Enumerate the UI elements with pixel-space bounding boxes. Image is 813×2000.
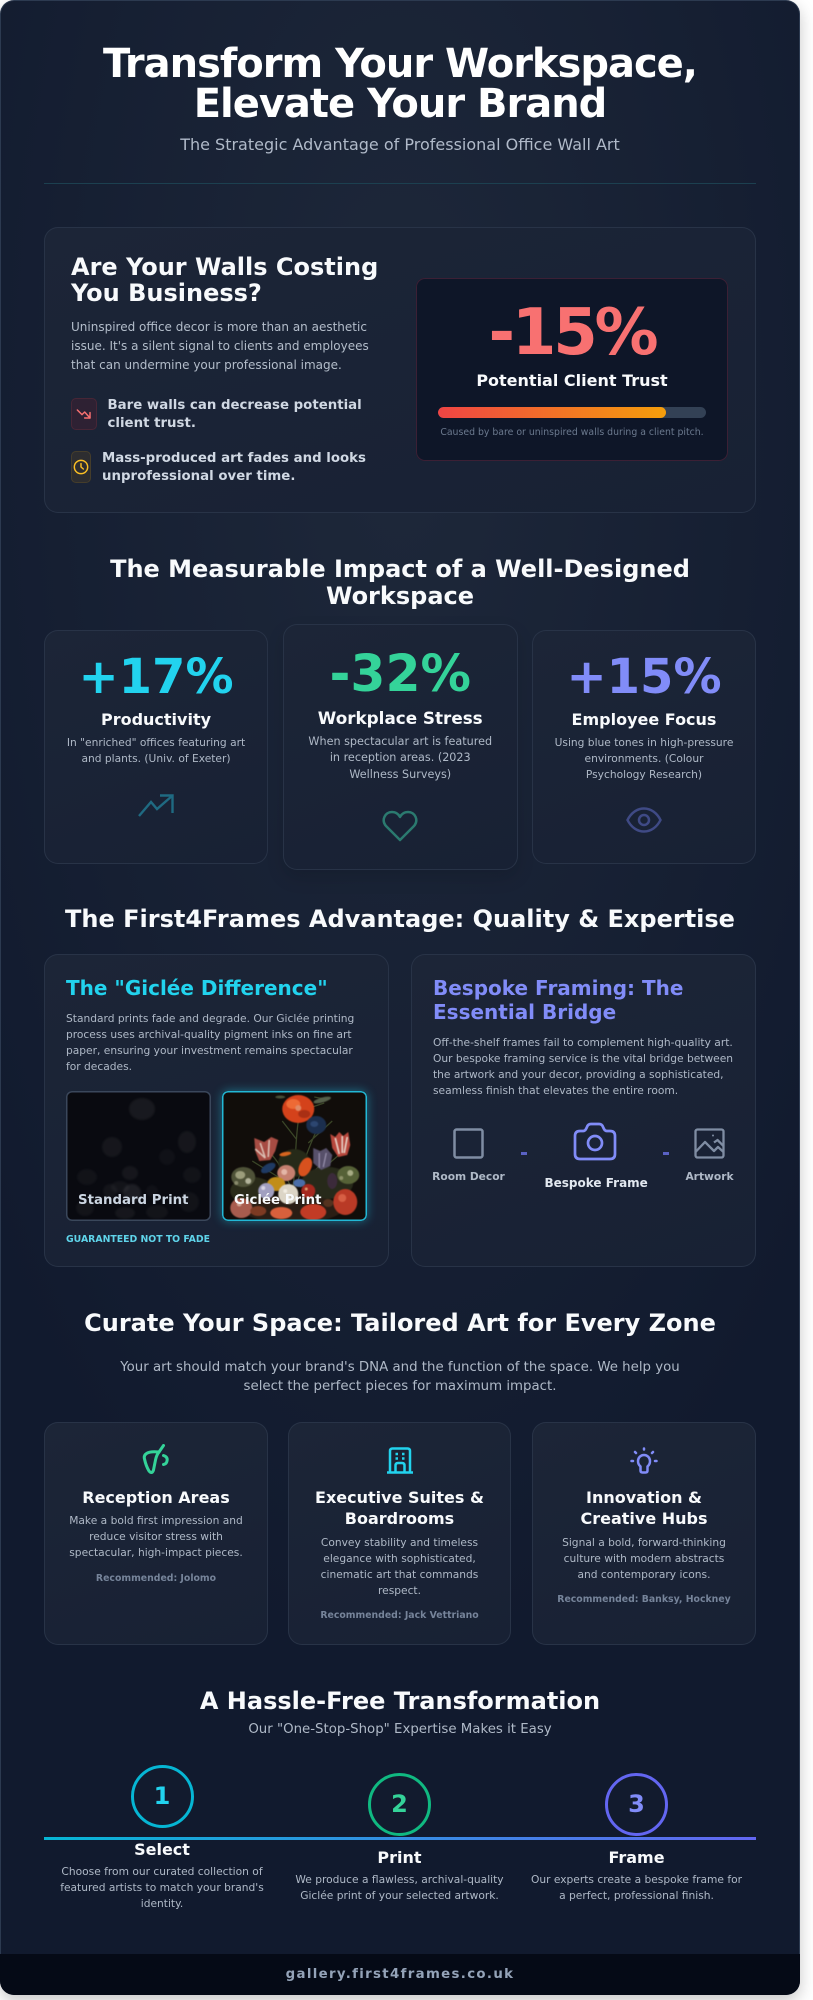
description: Wellness Surveys) [349,768,451,781]
description [321,1536,478,1597]
connector [662,1152,668,1154]
description: spectacular, high-impact pieces. [69,1546,243,1559]
zone title [580,1488,708,1528]
icon: heart [382,810,418,842]
description: elegance with sophisticated, [323,1552,476,1565]
step description: a perfect, professional finish. [559,1889,714,1902]
description [555,736,733,781]
step description [60,1865,264,1910]
description: Using blue tones in high-pressure [555,736,733,749]
icon: megaphone [142,1444,169,1474]
bullet: mass-produced art: unprofessional over time. [102,469,295,484]
badge: guaranteed: GUARANTEED NOT TO FADE [66,1234,210,1245]
heading: walls costing: You Business? [71,279,262,307]
recommendation: Recommended: Banksy, Hockney [557,1594,731,1605]
description: culture with modern abstracts [564,1552,724,1565]
step description [531,1873,742,1902]
title [103,41,697,127]
panel: innovation hubs [532,1422,756,1645]
step label: Frame [608,1848,665,1867]
big number: -15% [489,296,655,370]
text block: curate intro: Your art should match your brand's DNA and the function of the space. We help you [120,1360,680,1375]
icon: trending down [71,398,97,430]
step description: Our experts create a bespoke frame for [531,1873,742,1886]
label: room decor: Room Decor [432,1170,505,1183]
step 1: select [60,1765,264,1910]
panel: executive suites [288,1422,511,1645]
icon: clock [71,451,91,483]
icon: eye [626,807,662,833]
title: Elevate Your Brand [194,81,606,127]
step 3: frame [531,1773,742,1902]
step number circle [605,1773,668,1836]
number: +17% [78,649,234,705]
description: In "enriched" offices featuring art [67,736,245,749]
bullet: bare walls: client trust. [108,416,196,431]
bullet: bare walls [108,398,362,431]
bullet: mass-produced art: Mass-produced art fades and looks [102,450,366,466]
description: and plants. (Univ. of Exeter) [81,752,231,765]
text block: bespoke: Our bespoke framing service is the vital bridge between [433,1052,733,1065]
label: artwork: Artwork [685,1170,734,1183]
description [67,736,245,765]
step description: featured artists to match your brand's [60,1881,264,1894]
description: and contemporary icons. [578,1568,710,1581]
text block: uninspired decor [71,320,369,372]
description: respect. [378,1584,421,1597]
subheading: one-stop-shop: Our "One-Stop-Shop" Expertise Makes it Easy [248,1722,552,1737]
zone title [315,1488,484,1528]
text block: giclee: Standard prints fade and degrade. Our Giclée printing [66,1012,354,1025]
text block: bespoke: the artwork and your decor, providing a sophisticated, [433,1068,724,1081]
caption: Caused by bare or uninspired walls during a client pitch. [440,426,704,438]
heading: hassle-free transformation: A Hassle-Free Transformation [200,1687,600,1715]
step number circle [368,1773,431,1836]
number: -32% [329,644,471,703]
step description: Choose from our curated collection of [61,1865,263,1878]
text block: uninspired decor: that can undermine your professional image. [71,358,342,372]
step label: Select [134,1840,190,1859]
heading: measurable impact: The Measurable Impact of a Well-Designed [110,555,690,583]
step number circle: 3 [628,1790,645,1818]
heading: bespoke: Essential Bridge [433,1000,616,1024]
step 2: print [295,1773,504,1902]
panel: giclee difference [44,954,389,1267]
description: environments. (Colour [585,752,703,765]
text block: uninspired decor: Uninspired office decor is more than an aesthetic [71,320,367,334]
zone title: Executive Suites & [315,1488,484,1507]
panel: employee focus stat [532,630,756,864]
text block: giclee: for decades. [66,1060,132,1073]
footer url: gallery.first4frames.co.uk [286,1967,514,1982]
description [308,735,492,781]
description [69,1514,243,1559]
heading: walls costing: Are Your Walls Costing [71,253,378,281]
text block: bespoke: seamless finish that elevates the entire room. [433,1084,678,1097]
image: vivid giclee print [222,1091,366,1221]
heading: giclee: The "Giclée Difference" [66,976,328,1000]
recommendation: Recommended: Jolomo [96,1573,216,1584]
heading: curate your space: Curate Your Space: Tailored Art for Every Zone [84,1309,716,1337]
footer [0,1954,800,1995]
recommendation: Recommended: Jack Vettriano [320,1610,479,1621]
text block: curate intro: select the perfect pieces for maximum impact. [244,1379,556,1394]
text block: giclee [66,1012,354,1073]
panel: productivity stat [44,630,268,864]
subtitle: The Strategic Advantage of Professional Office Wall Art [180,135,620,154]
heading: walls costing [70,253,378,307]
icon: room decor square [453,1128,484,1159]
step number circle: 2 [391,1790,408,1818]
description: When spectacular art is featured [308,735,492,748]
icon: light bulb [630,1447,658,1474]
zone title: Innovation & [586,1488,702,1507]
heading: bespoke [433,976,683,1024]
image label: giclee: Giclée Print [234,1193,321,1208]
label: Employee Focus [572,710,716,729]
connector [521,1152,527,1154]
title: Transform Your Workspace, [103,41,697,87]
zone title: Creative Hubs [580,1509,708,1528]
timeline line [44,1836,756,1840]
text block: giclee: paper, ensuring your investment remains spectacular [66,1044,353,1057]
panel: workplace stress stat [283,624,518,870]
callout: client trust stat [416,278,728,461]
panel: reception areas [44,1422,268,1645]
bullet: bare walls: Bare walls can decrease potential [108,398,362,412]
description: Convey stability and timeless [321,1536,478,1549]
description: Signal a bold, forward-thinking [562,1536,726,1549]
step description: Giclée print of your selected artwork. [300,1889,499,1902]
text block: uninspired decor: issue. It's a silent signal to clients and employees [71,339,369,353]
description: Make a bold first impression and [69,1514,243,1527]
description: Psychology Research) [586,768,702,781]
icon: bespoke frame camera [574,1122,616,1160]
panel: are your walls costing you business [44,227,756,513]
image: faded standard print [66,1091,211,1221]
text block: bespoke [433,1036,733,1097]
icon: artwork [694,1128,725,1159]
description: reduce visitor stress with [89,1530,223,1543]
description: cinematic art that commands [321,1568,478,1581]
icon: trending up [138,794,174,817]
description: in reception areas. (2023 [330,751,471,764]
text block: curate intro [120,1360,680,1394]
label: Workplace Stress [318,708,483,728]
image label: standard: Standard Print [78,1193,189,1208]
progress bar [438,407,706,418]
heading: measurable impact: Workspace [326,582,474,610]
step description [295,1873,504,1902]
heading: first4frames advantage: The First4Frames Advantage: Quality & Expertise [65,905,735,933]
number: +15% [566,649,722,705]
bullet: mass-produced art [102,450,366,484]
heading: bespoke: Bespoke Framing: The [433,976,683,1000]
step description: identity. [141,1897,183,1910]
text block: giclee: process uses archival-quality pigment inks on fine art [66,1028,352,1041]
step number circle [130,1765,194,1828]
panel: bespoke framing [410,954,756,1267]
label: bespoke frame: Bespoke Frame [544,1176,648,1190]
zone title: Reception Areas [82,1488,230,1507]
zone title: Boardrooms [345,1509,454,1528]
step description: We produce a flawless, archival-quality [295,1873,504,1886]
step label: Print [377,1848,422,1867]
description [562,1536,726,1581]
label: Productivity [101,710,211,729]
stat label: Potential Client Trust [476,371,668,390]
heading: measurable impact [110,555,690,610]
step number circle: 1 [154,1782,170,1810]
text block: bespoke: Off-the-shelf frames fail to complement high-quality art. [433,1036,733,1049]
icon: building [387,1447,413,1474]
